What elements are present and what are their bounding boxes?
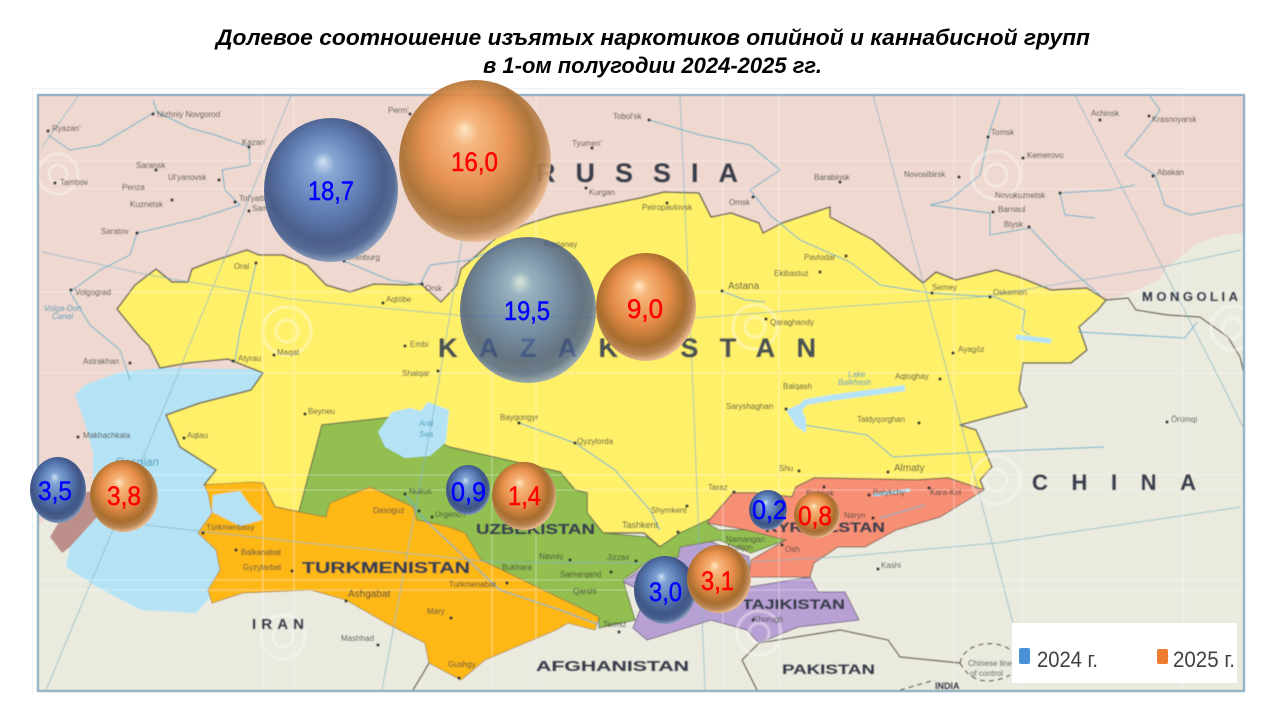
bubble: 2025 value 16,0: 16,0 bbox=[451, 147, 498, 177]
Uzbekistan territory bbox=[299, 417, 786, 628]
city labels and dots: Gyzylarbat bbox=[243, 563, 282, 572]
city labels and dots: Balykchy bbox=[873, 488, 905, 497]
city labels and dots: Aral bbox=[418, 419, 433, 428]
bubble: 2025 value 3,1: 3,1 bbox=[701, 566, 734, 596]
city labels and dots: Beyneu bbox=[308, 407, 335, 416]
city labels and dots: Balkhash bbox=[838, 378, 871, 387]
bubble: 2024 value 0,9: 0,9 bbox=[451, 477, 486, 507]
bubble: 2025 value 3,1 bbox=[687, 545, 751, 613]
bubble: 2024 value 0,9 bbox=[446, 465, 490, 515]
bubble: 2024 value 0,2: 0,2 bbox=[752, 495, 787, 525]
city labels and dots: Aqtöbe bbox=[386, 295, 412, 304]
city labels and dots: Tobol'sk bbox=[613, 112, 643, 121]
country labels: AFGHANISTAN bbox=[536, 658, 689, 675]
city labels and dots: Urgench bbox=[435, 510, 465, 519]
country labels: UZBEKISTAN bbox=[476, 521, 595, 538]
city labels and dots: Penza bbox=[122, 183, 145, 192]
Turkmenistan territory bbox=[198, 482, 599, 680]
bubble: 2025 value 1,4 bbox=[492, 462, 556, 530]
bubble: 2025 value 3,8 bbox=[90, 460, 158, 532]
map frame bbox=[38, 95, 1244, 691]
city labels and dots: Kuznetsk bbox=[130, 200, 164, 209]
rivers and lakes bbox=[48, 96, 1243, 625]
country labels: KYRGYZSTAN bbox=[765, 519, 885, 535]
country labels: TURKMENISTAN bbox=[302, 560, 470, 577]
city labels and dots: Mashhad bbox=[341, 634, 374, 643]
city labels and dots: Pavlodar bbox=[804, 253, 836, 262]
title bbox=[214, 25, 1091, 78]
city labels and dots: Tomsk bbox=[991, 128, 1015, 137]
city labels and dots: Ashgabat bbox=[348, 589, 390, 600]
country labels: TAJIKISTAN bbox=[742, 596, 845, 612]
city labels and dots: Gushgy bbox=[448, 660, 476, 669]
city labels and dots: Samara bbox=[252, 204, 281, 213]
city labels and dots: Naryn bbox=[844, 511, 865, 520]
title: в 1-ом полугодии 2024-2025 гг. bbox=[483, 53, 822, 78]
city labels and dots: Maqat bbox=[277, 348, 300, 357]
city labels and dots: Ayagöz bbox=[958, 345, 985, 354]
Caspian Sea bbox=[66, 368, 262, 614]
city labels and dots: Mary bbox=[427, 607, 445, 616]
city labels and dots: Kostanay bbox=[544, 240, 577, 249]
city labels and dots: Semey bbox=[932, 283, 957, 292]
city labels and dots: Astana bbox=[728, 281, 760, 292]
city labels and dots: Jizzax bbox=[607, 553, 629, 562]
Tajikistan territory bbox=[623, 540, 859, 643]
city labels and dots: Qarshi bbox=[573, 587, 597, 596]
bubble: 2024 value 3,0 bbox=[634, 556, 696, 624]
Kyrgyzstan territory bbox=[707, 478, 984, 577]
city labels and dots: Qyzylorda bbox=[577, 437, 614, 446]
city labels and dots: Tashkent bbox=[622, 520, 659, 530]
city labels and dots: Taraz bbox=[708, 483, 728, 492]
bubble: 2025 value 1,4: 1,4 bbox=[508, 481, 541, 511]
city labels and dots: Kemerovo bbox=[1027, 151, 1064, 160]
city labels and dots: Türkmenbasy bbox=[206, 523, 254, 532]
bubble: 2025 value 3,8: 3,8 bbox=[107, 481, 141, 511]
bubble: 2025 value 0,8 bbox=[794, 492, 840, 538]
city labels and dots: Saratov bbox=[101, 227, 129, 236]
Russia territory bbox=[38, 96, 1244, 525]
bubble: 2024 value 0,2 bbox=[749, 490, 787, 530]
city labels and dots: Barabinsk bbox=[814, 173, 851, 182]
city labels and dots: Lake bbox=[848, 370, 866, 379]
city labels and dots: Saryshaghan bbox=[726, 402, 773, 411]
city labels and dots: Turkmenabat bbox=[449, 580, 497, 589]
city labels and dots: Novosibirsk bbox=[904, 170, 946, 179]
city labels and dots: Volgograd bbox=[75, 288, 111, 297]
city labels and dots: Petropavlovsk bbox=[642, 203, 693, 212]
watermark spirals and grid bbox=[38, 96, 1255, 691]
Azerbaijan area bbox=[50, 490, 100, 553]
bubble: 2025 value 9,0: 9,0 bbox=[627, 294, 663, 324]
country labels: IRAN bbox=[252, 616, 304, 633]
city labels and dots: Sea bbox=[132, 470, 150, 481]
bubble: 2024 value 18,7: 18,7 bbox=[308, 176, 354, 206]
city labels and dots: Navoiy bbox=[539, 552, 563, 561]
city labels and dots: Ul'yanovsk bbox=[168, 173, 207, 182]
city labels and dots: Bishkek bbox=[806, 489, 835, 498]
bubble: 2024 value 3,0: 3,0 bbox=[649, 577, 682, 607]
other borders bbox=[413, 298, 1244, 690]
city labels and dots: Kazan' bbox=[242, 138, 267, 147]
legend: 2024 г. bbox=[1037, 647, 1098, 672]
country labels: INDIA bbox=[935, 681, 960, 691]
city labels and dots: Caspian bbox=[115, 455, 159, 469]
city labels and dots: Shu bbox=[779, 464, 793, 473]
city labels and dots: Krasnoyarsk bbox=[1152, 115, 1197, 124]
city labels and dots: Nizhniy Novgorod bbox=[157, 110, 220, 119]
city labels and dots: Nukus bbox=[409, 487, 432, 496]
map background: neighbouring land bbox=[38, 96, 1244, 691]
city labels and dots: Omsk bbox=[729, 198, 751, 207]
city labels and dots: Aqtau bbox=[187, 431, 208, 440]
city labels and dots: Taldyqorghan bbox=[857, 415, 905, 424]
graticule lines bbox=[42, 95, 1243, 690]
country labels: MONGOLIA bbox=[1142, 289, 1239, 304]
city labels and dots: Andijon bbox=[726, 543, 753, 552]
city labels and dots: Atyrau bbox=[238, 354, 261, 363]
city labels and dots: Tyumen' bbox=[572, 139, 602, 148]
city labels and dots: Örümqi bbox=[1171, 415, 1197, 424]
country labels: PAKISTAN bbox=[782, 661, 875, 677]
city labels and dots: Achinsk bbox=[1091, 109, 1120, 118]
city labels and dots: Khorugh bbox=[753, 615, 783, 624]
city labels and dots: Embi bbox=[410, 340, 428, 349]
city labels and dots: Volga-Don bbox=[44, 304, 82, 313]
bubble: 2024 value 3,5 bbox=[30, 457, 86, 523]
city labels and dots: Tambov bbox=[60, 178, 88, 187]
outer image edge bbox=[32, 88, 1185, 695]
Kazakhstan territory bbox=[117, 192, 1106, 547]
city labels and dots: Dasoguz bbox=[373, 506, 405, 515]
bubble: 2025 value 0,8: 0,8 bbox=[798, 501, 832, 531]
city labels and dots: Biysk bbox=[1004, 220, 1024, 229]
city labels and dots: Oral bbox=[234, 262, 249, 271]
city labels and dots: Termiz bbox=[603, 620, 627, 629]
city labels and dots: Ryazan' bbox=[52, 124, 81, 133]
city labels and dots: of control bbox=[970, 669, 1003, 678]
country labels: CHINA bbox=[1032, 470, 1196, 495]
title: Долевое соотношение изъятых наркотиков опийной и каннабисной групп bbox=[214, 25, 1091, 50]
bubble: 2025 value 16,0 bbox=[399, 80, 551, 242]
city labels and dots bbox=[44, 106, 1197, 680]
country labels bbox=[252, 158, 1239, 691]
city labels and dots: Qaraghandy bbox=[770, 318, 814, 327]
city labels and dots: Kara-Kol bbox=[930, 488, 961, 497]
bubble: 2024 value 3,5: 3,5 bbox=[38, 476, 72, 506]
city labels and dots: Sea bbox=[419, 430, 434, 439]
city labels and dots: Astrakhan bbox=[83, 357, 119, 366]
city labels and dots: Perm' bbox=[388, 106, 409, 115]
city labels and dots: Tol'yatti bbox=[239, 194, 266, 203]
city labels and dots: Oskemen bbox=[993, 288, 1027, 297]
city labels and dots: Canal bbox=[52, 312, 73, 321]
city labels and dots: Kashi bbox=[881, 561, 901, 570]
city labels and dots: Shalqar bbox=[402, 369, 430, 378]
city labels and dots: Balkanabat bbox=[241, 548, 282, 557]
city labels and dots: Kurgan bbox=[589, 188, 615, 197]
legend: 2025 г. bbox=[1173, 647, 1235, 672]
country labels: RUSSIA bbox=[536, 158, 738, 188]
Kara-Bogaz lagoon bbox=[212, 491, 262, 526]
bubble: 2024 value 18,7 bbox=[264, 118, 398, 262]
city labels and dots: Bukhara bbox=[502, 563, 532, 572]
city labels and dots: Balqash bbox=[783, 382, 812, 391]
city labels and dots: Namangan bbox=[726, 535, 765, 544]
city labels and dots: Makhachkala bbox=[83, 431, 131, 440]
city labels and dots: Osh bbox=[785, 545, 800, 554]
Aral Sea bbox=[378, 402, 449, 458]
country labels: KAZAKHSTAN bbox=[438, 333, 816, 363]
city labels and dots: Saransk bbox=[136, 161, 166, 170]
bubble: 2024 value 19,5: 19,5 bbox=[504, 296, 550, 326]
bubble: 2024 value 19,5 bbox=[460, 237, 596, 383]
city labels and dots: Samarqand bbox=[560, 570, 601, 579]
city labels and dots: Orsk bbox=[425, 284, 443, 293]
city labels and dots: Shymkent bbox=[651, 506, 687, 515]
city labels and dots: Ekibastuz bbox=[774, 269, 809, 278]
city labels and dots: Orenburg bbox=[346, 253, 380, 262]
city labels and dots: Aqtoghay bbox=[895, 372, 929, 381]
legend bbox=[1012, 623, 1237, 683]
city labels and dots: Abakan bbox=[1157, 168, 1184, 177]
city labels and dots: Bayqongyr bbox=[500, 413, 539, 422]
bubble: 2025 value 9,0 bbox=[596, 253, 696, 361]
city labels and dots: Barnaul bbox=[998, 205, 1026, 214]
city labels and dots: Chinese line bbox=[968, 659, 1013, 668]
city labels and dots: Novokuznetsk bbox=[995, 191, 1046, 200]
city labels and dots: Almaty bbox=[894, 463, 925, 474]
